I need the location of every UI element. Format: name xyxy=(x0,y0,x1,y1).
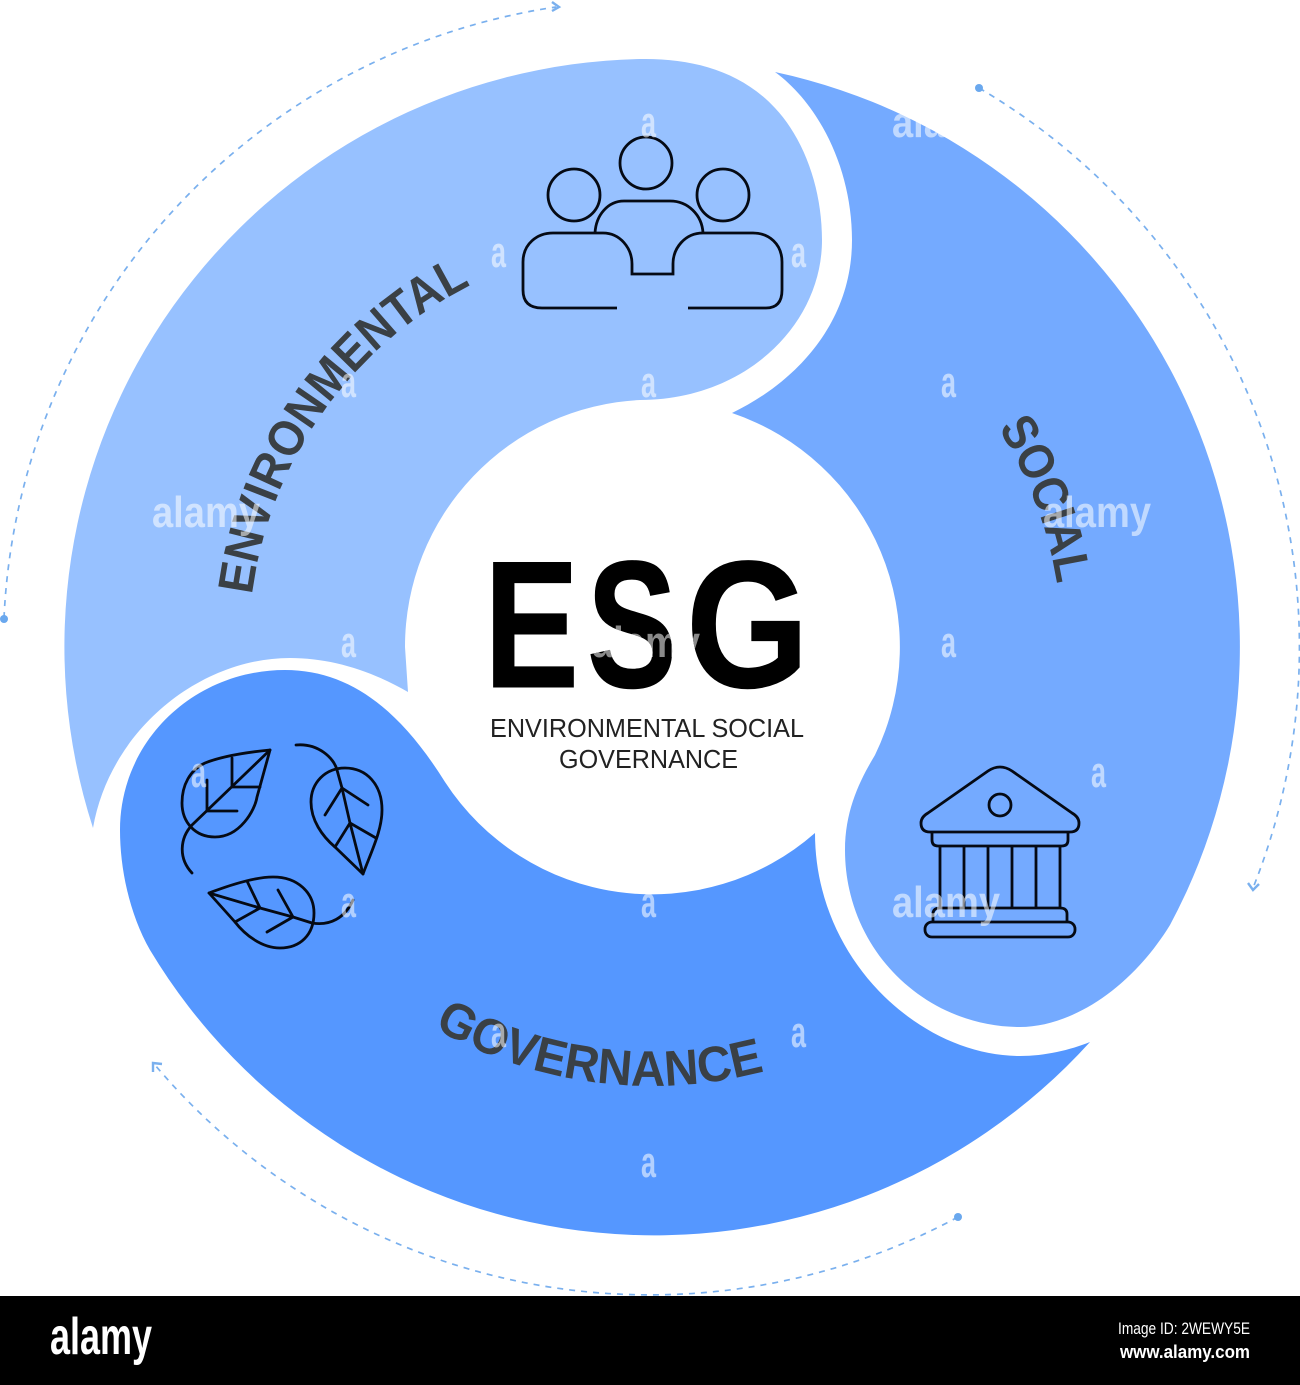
watermarks: a xyxy=(641,878,656,927)
segment: Governance xyxy=(120,670,1090,1235)
watermarks: a xyxy=(491,228,506,277)
icon: bank building xyxy=(921,767,1079,937)
watermarks: a xyxy=(641,358,656,407)
watermarks: a xyxy=(341,618,356,667)
watermarks: a xyxy=(491,1008,506,1057)
dashed arc arrow: right xyxy=(975,84,1299,890)
subtitle: Environmental Social Governance xyxy=(490,713,804,774)
icon: people group xyxy=(523,137,782,308)
watermarks: a xyxy=(941,358,956,407)
icon: leaves cycle xyxy=(182,745,382,948)
subtitle: Environmental Social Governance: GOVERNANCE xyxy=(559,744,738,774)
title: ESG: E xyxy=(484,524,579,726)
watermarks: alamy xyxy=(152,488,260,537)
watermarks: alamy xyxy=(892,878,1000,927)
watermarks: a xyxy=(341,878,356,927)
watermarks: a xyxy=(1091,748,1106,797)
segment: Environmental xyxy=(64,59,822,828)
footer bar xyxy=(0,1296,1300,1385)
watermarks: a xyxy=(341,358,356,407)
watermark on ESG title: alamy xyxy=(592,618,700,667)
title: ESG: S xyxy=(587,524,677,726)
label: Environmental: ENVIRONMENTAL xyxy=(218,264,470,592)
watermarks xyxy=(152,98,1151,1187)
watermarks: alamy xyxy=(1043,488,1151,537)
subtitle: Environmental Social Governance: ENVIRONMENTAL SOCIAL xyxy=(490,713,804,743)
label: Social: SOCIAL xyxy=(1002,416,1088,583)
watermarks: alamy xyxy=(892,98,1000,147)
segment: Social xyxy=(732,72,1240,1027)
footer logo: alamy xyxy=(50,1308,152,1366)
watermarks: a xyxy=(791,228,806,277)
watermarks: a xyxy=(641,98,656,147)
dashed arc arrow: bottom xyxy=(153,1063,962,1295)
watermarks: a xyxy=(191,748,206,797)
footer image id: Image ID: 2WEWY5E xyxy=(1118,1319,1250,1338)
watermarks: a xyxy=(941,618,956,667)
watermarks: a xyxy=(791,1008,806,1057)
title: ESG: G xyxy=(686,524,809,726)
watermarks: a xyxy=(641,1138,656,1187)
dashed arc arrow: top left xyxy=(0,2,559,623)
footer url: www.alamy.com xyxy=(1119,1342,1250,1362)
label: Governance: GOVERNANCE xyxy=(440,1004,763,1086)
